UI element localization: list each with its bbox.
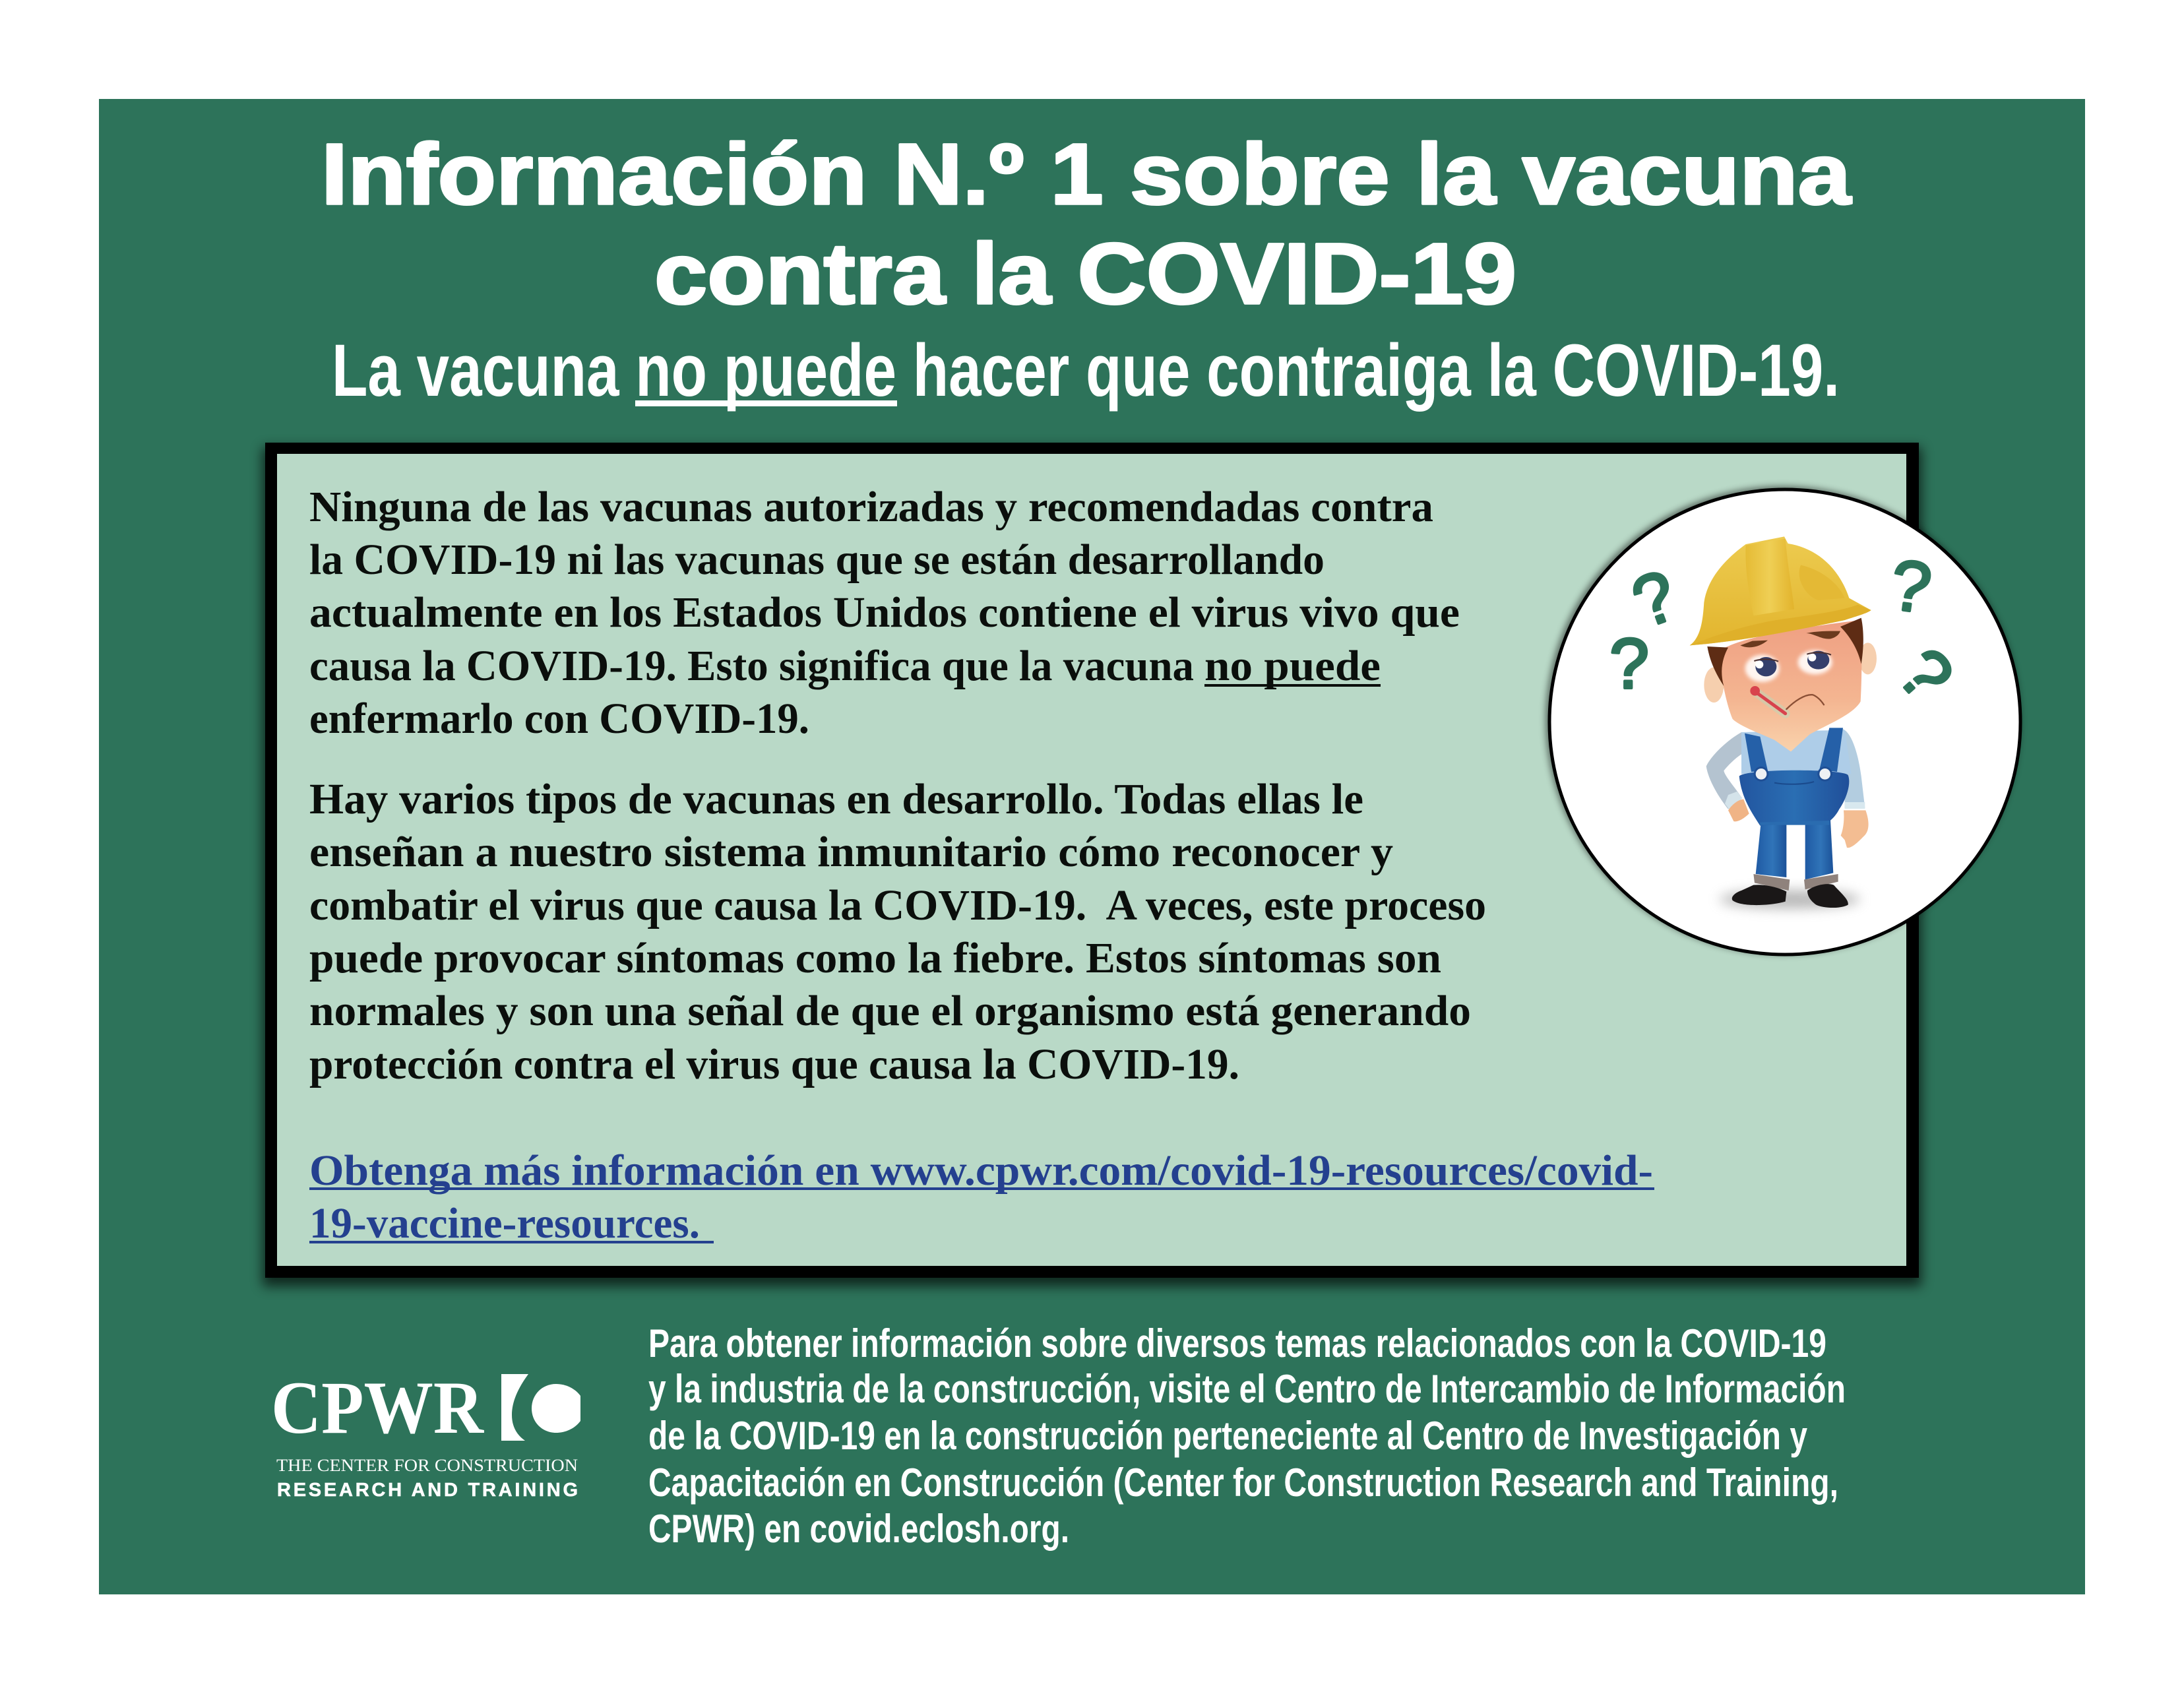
title: Información N.º 1 sobre la vacuna	[321, 125, 1852, 222]
link: more information: Obtenga más información en www.cpwr.com/covid-19-resources/covid-	[309, 1146, 1653, 1195]
logo: CPWR: THE CENTER FOR CONSTRUCTION	[276, 1455, 578, 1475]
text block: footer information: Capacitación en Construcción (Center for Construction Research and Training,	[648, 1460, 1838, 1505]
text block: first paragraph: la COVID-19 ni las vacunas que se están desarrollando	[309, 536, 1325, 584]
text block: footer information: y la industria de la construcción, visite el Centro de Intercambio de Información	[648, 1367, 1846, 1411]
text block: second paragraph: Hay varios tipos de vacunas en desarrollo. Todas ellas le	[309, 775, 1363, 823]
text block: first paragraph: enfermarlo con COVID-19.	[309, 695, 809, 743]
text block: second paragraph: protección contra el virus que causa la COVID-19.	[309, 1040, 1239, 1088]
logo: CPWR	[271, 1367, 580, 1501]
icon: question marks	[1609, 544, 1969, 716]
icon: worker body	[1706, 728, 1869, 908]
logo: CPWR: RESEARCH AND TRAINING	[277, 1480, 578, 1501]
text block: second paragraph: combatir el virus que causa la COVID-19. A veces, este proceso	[309, 881, 1486, 929]
text block: second paragraph: enseñan a nuestro sistema inmunitario cómo reconocer y	[309, 828, 1393, 876]
link: more information	[309, 1146, 1654, 1247]
text block: second paragraph	[309, 775, 1486, 1088]
text block: first paragraph: Ninguna de las vacunas autorizadas y recomendadas contra	[309, 483, 1433, 531]
panel: vaccine information box	[263, 443, 1921, 1286]
text block: footer information: Para obtener información sobre diversos temas relacionados con la COVID-19	[648, 1321, 1826, 1365]
link: more information: 19-vaccine-resources.	[309, 1199, 700, 1247]
icon: question marks: ?	[1622, 554, 1687, 643]
text block: first paragraph: actualmente en los Estados Unidos contiene el virus vivo que	[309, 588, 1460, 637]
subtitle: La vacuna no puede hacer que contraiga la COVID-19.	[332, 329, 1840, 412]
icon: question marks: ?	[1886, 544, 1936, 629]
text block: footer information: CPWR) en covid.eclosh.org.	[648, 1507, 1069, 1551]
icon: question marks: ?	[1883, 633, 1969, 716]
icon: question marks: ?	[1609, 623, 1649, 703]
illustration: sick construction worker in circle	[1545, 486, 2020, 955]
text block: first paragraph: causa la COVID-19. Esto significa que la vacuna	[309, 642, 1194, 690]
text block: footer information: de la COVID-19 en la construcción perteneciente al Centro de Investigación y	[648, 1414, 1808, 1458]
title	[321, 125, 1852, 322]
text block: footer information	[648, 1321, 1846, 1551]
text block: first paragraph: no puede	[1204, 642, 1381, 690]
text block: second paragraph: normales y son una señal de que el organismo está generando	[309, 987, 1471, 1035]
logo: CPWR: CPWR	[271, 1367, 484, 1449]
text block: first paragraph	[309, 483, 1460, 743]
title: contra la COVID-19	[654, 225, 1516, 322]
icon: worker head	[1690, 536, 1877, 751]
text block: second paragraph: puede provocar síntomas como la fiebre. Estos síntomas son	[309, 934, 1441, 982]
